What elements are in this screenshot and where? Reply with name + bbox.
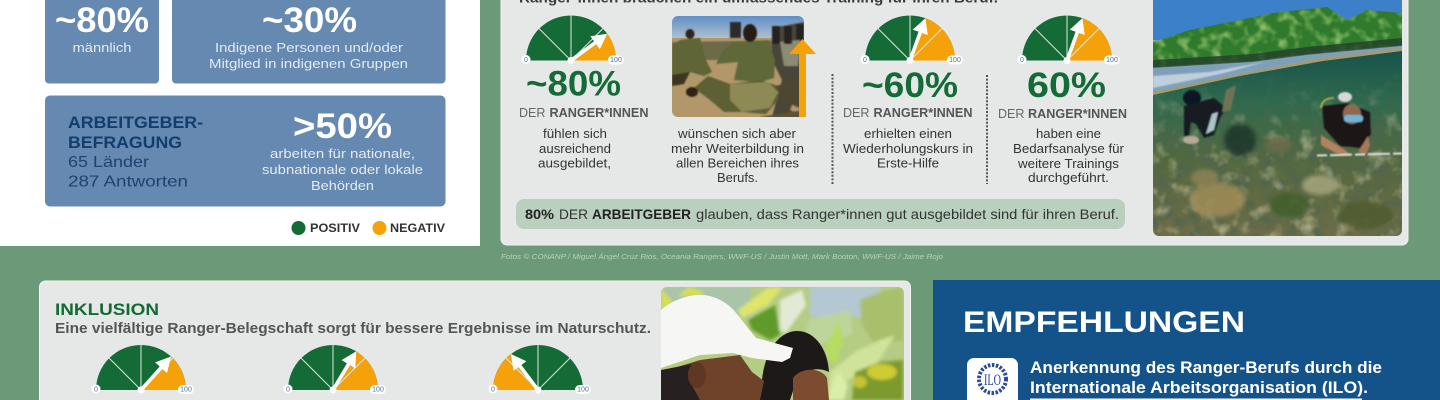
stat: about 80 percent feel trained: ausreichend [539, 142, 611, 156]
gauge: inclusion two [284, 345, 386, 394]
gauge: 60 percent needs analysis [1018, 15, 1120, 64]
text: ILO recognition: Internationale Arbeitsorganisation (ILO). [1030, 379, 1368, 397]
stat: 60 percent needs analysis: weitere Trainings [1017, 157, 1119, 171]
stat: about 80 percent feel trained: RANGER*INNEN [550, 106, 648, 120]
gauge: 60 percent first aid [860, 15, 963, 64]
stat: 60 percent needs analysis: DER [998, 107, 1024, 121]
gauge: inclusion two: 100 [372, 386, 384, 394]
icon: ILO logo: ILO [984, 372, 1001, 389]
gauge: 60 percent needs analysis: 100 [1106, 57, 1118, 64]
stat: about 60 percent refresher [843, 66, 973, 170]
stat box: employer survey: BEFRAGUNG [68, 134, 182, 152]
stat box: indigenous share: Mitglied in indigenen Gruppen [209, 56, 408, 71]
stat: about 60 percent refresher: Wiederholungskurs in [843, 142, 973, 156]
stat box: employer survey: 65 Länder [68, 154, 150, 171]
stat: 60 percent needs analysis: durchgeführt. [1028, 171, 1109, 185]
gauge: 80 percent trained [522, 16, 624, 67]
stat: about 60 percent refresher: ~60% [862, 66, 958, 105]
stat: 60 percent needs analysis [998, 66, 1127, 185]
stat: about 60 percent refresher: DER [843, 106, 870, 120]
subheading: inclusion: Eine vielfältige Ranger-Belegschaft sorgt für bessere Ergebnisse im Naturschutz. [55, 320, 651, 337]
stat: about 60 percent refresher: Erste-Hilfe [877, 156, 939, 170]
photo: rangers first aid training [672, 16, 804, 118]
panel: recommendations [933, 280, 1440, 400]
text: ILO recognition: Anerkennung des Ranger-Berufs durch die [1030, 359, 1382, 377]
stat box: employer survey: Behörden [311, 178, 374, 193]
stat box: indigenous share [172, 0, 446, 84]
stat box: employer survey [45, 96, 446, 206]
gauge: 80 percent trained: 100 [610, 57, 622, 64]
heading: recommendations: EMPFEHLUNGEN [963, 306, 1245, 339]
stat box: indigenous share: ~30% [262, 1, 357, 40]
legend: NEGATIV [390, 221, 445, 235]
stat: about 80 percent feel trained: ~80% [526, 64, 621, 104]
gauge: 60 percent first aid: 100 [949, 57, 961, 64]
panel: survey demographics [0, 0, 480, 246]
stat box: employer survey: ARBEITGEBER- [68, 114, 203, 132]
text: ILO recognition [1030, 359, 1382, 400]
stat: about 80 percent feel trained: DER [519, 106, 546, 120]
stat box: employer survey: >50% [293, 107, 392, 146]
gauge: inclusion one: 0 [94, 386, 98, 394]
legend: POSITIV [310, 221, 360, 235]
arrow: more training wanted [789, 39, 816, 117]
panel: inclusion [40, 281, 910, 400]
stat box: male share: männlich [72, 40, 132, 55]
gauge: 60 percent needs analysis: 0 [1020, 57, 1024, 64]
panel: training [501, 0, 1408, 245]
icon: ILO logo [967, 358, 1018, 400]
legend [292, 221, 445, 235]
callout: employers: ARBEITGEBER [592, 206, 691, 222]
gauge: inclusion one [92, 345, 194, 395]
heading: inclusion: INKLUSION [55, 300, 159, 319]
stat: about 80 percent feel trained [519, 64, 648, 170]
callout: employers: 80% [525, 206, 555, 222]
stat: about 80 percent feel trained: fühlen sich [543, 127, 607, 141]
gauge: inclusion three [488, 345, 591, 395]
callout: employers: glauben, dass Ranger*innen gut ausgebildet sind für ihren Beruf. [696, 206, 1119, 222]
callout: employers [516, 199, 1125, 229]
gauge: 60 percent first aid: 0 [863, 57, 867, 64]
stat box: employer survey: 287 Antworten [68, 174, 188, 190]
stat: about 80 percent feel trained: ausgebildet, [538, 156, 611, 170]
text: wish for more training [671, 127, 804, 185]
text: wish for more training: allen Bereichen ihres [676, 156, 799, 170]
text: wish for more training: Berufs. [717, 171, 758, 185]
stat: 60 percent needs analysis: haben eine [1036, 127, 1101, 141]
stat: about 60 percent refresher: RANGER*INNEN [874, 106, 972, 120]
stat box: employer survey: subnationale oder lokale [262, 162, 423, 177]
stat box: male share [45, 0, 159, 84]
gauge: inclusion two: 0 [286, 386, 290, 394]
stat box: male share: ~80% [55, 1, 149, 40]
text: wish for more training: wünschen sich aber [677, 127, 796, 141]
gauge: inclusion three: 0 [491, 386, 495, 394]
stat: 60 percent needs analysis: RANGER*INNEN [1028, 107, 1127, 121]
stat box: indigenous share: Indigene Personen und/oder [215, 40, 404, 55]
photo: divers in mangroves [1153, 0, 1402, 240]
gauge: inclusion one: 100 [180, 386, 192, 394]
stat box: employer survey: arbeiten für nationale, [270, 146, 415, 161]
gauge: 80 percent trained: 0 [524, 57, 528, 64]
text: wish for more training: mehr Weiterbildung in [671, 142, 804, 156]
stat: 60 percent needs analysis: Bedarfsanalyse für [1013, 142, 1124, 156]
photo: women rangers [661, 287, 904, 400]
stat: about 60 percent refresher: erhielten einen [864, 127, 952, 141]
photo credits: Fotos © CONANP / Miguel Ángel Cruz Rios, Oceania Rangers, WWF-US / Justin Mott, Mark Booton, WWF-US / Jaime Rojo [501, 252, 943, 261]
gauge: inclusion three: 100 [577, 386, 589, 394]
stat: 60 percent needs analysis: 60% [1027, 66, 1106, 105]
callout: employers: DER [559, 206, 588, 222]
